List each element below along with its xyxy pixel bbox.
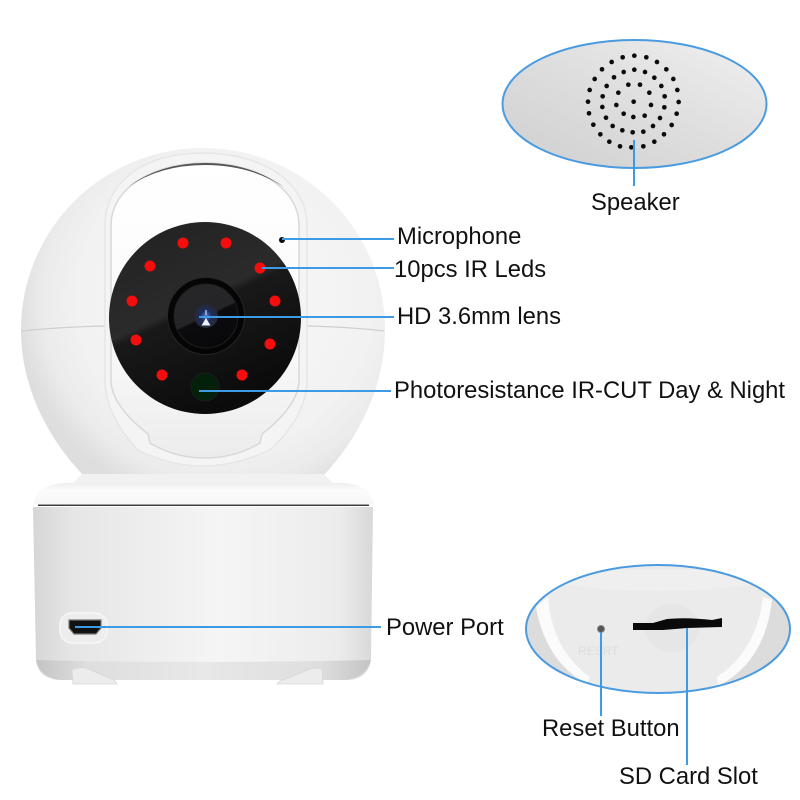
speaker holes [586, 53, 681, 150]
callout: IR LEDs: 10pcs IR Leds [394, 256, 546, 283]
camera dome [21, 148, 385, 484]
camera [21, 148, 385, 684]
callout: power port: Power Port [386, 614, 504, 641]
panel: underside close-up [525, 564, 791, 694]
callout: microphone: Microphone [397, 223, 521, 250]
outer panel recess [105, 153, 307, 466]
callout: lens: HD 3.6mm lens [397, 303, 561, 330]
underside outline [526, 565, 790, 693]
power port [60, 613, 107, 643]
IR LEDs [126, 238, 280, 380]
panel: speaker close-up [502, 40, 766, 168]
base body [33, 483, 374, 680]
microphone hole [279, 237, 285, 243]
reset engraving: RESRT [578, 644, 619, 658]
callout: speaker: Speaker [591, 189, 680, 216]
photoresistor [191, 373, 219, 401]
black lens face [109, 222, 301, 414]
callout: reset button [542, 632, 680, 742]
feet [72, 668, 323, 684]
SD card slot [633, 618, 722, 630]
lens [168, 278, 244, 354]
callout: SD card slot: SD Card Slot [619, 763, 758, 790]
underside shading [527, 597, 789, 685]
callout: reset button: Reset Button [542, 715, 680, 742]
callout: photoresistance: Photoresistance IR-CUT Day & Night [394, 377, 785, 404]
panel top shadow [128, 163, 284, 187]
reset hole [598, 626, 604, 632]
callout: speaker [591, 140, 680, 216]
front panel [111, 163, 299, 458]
